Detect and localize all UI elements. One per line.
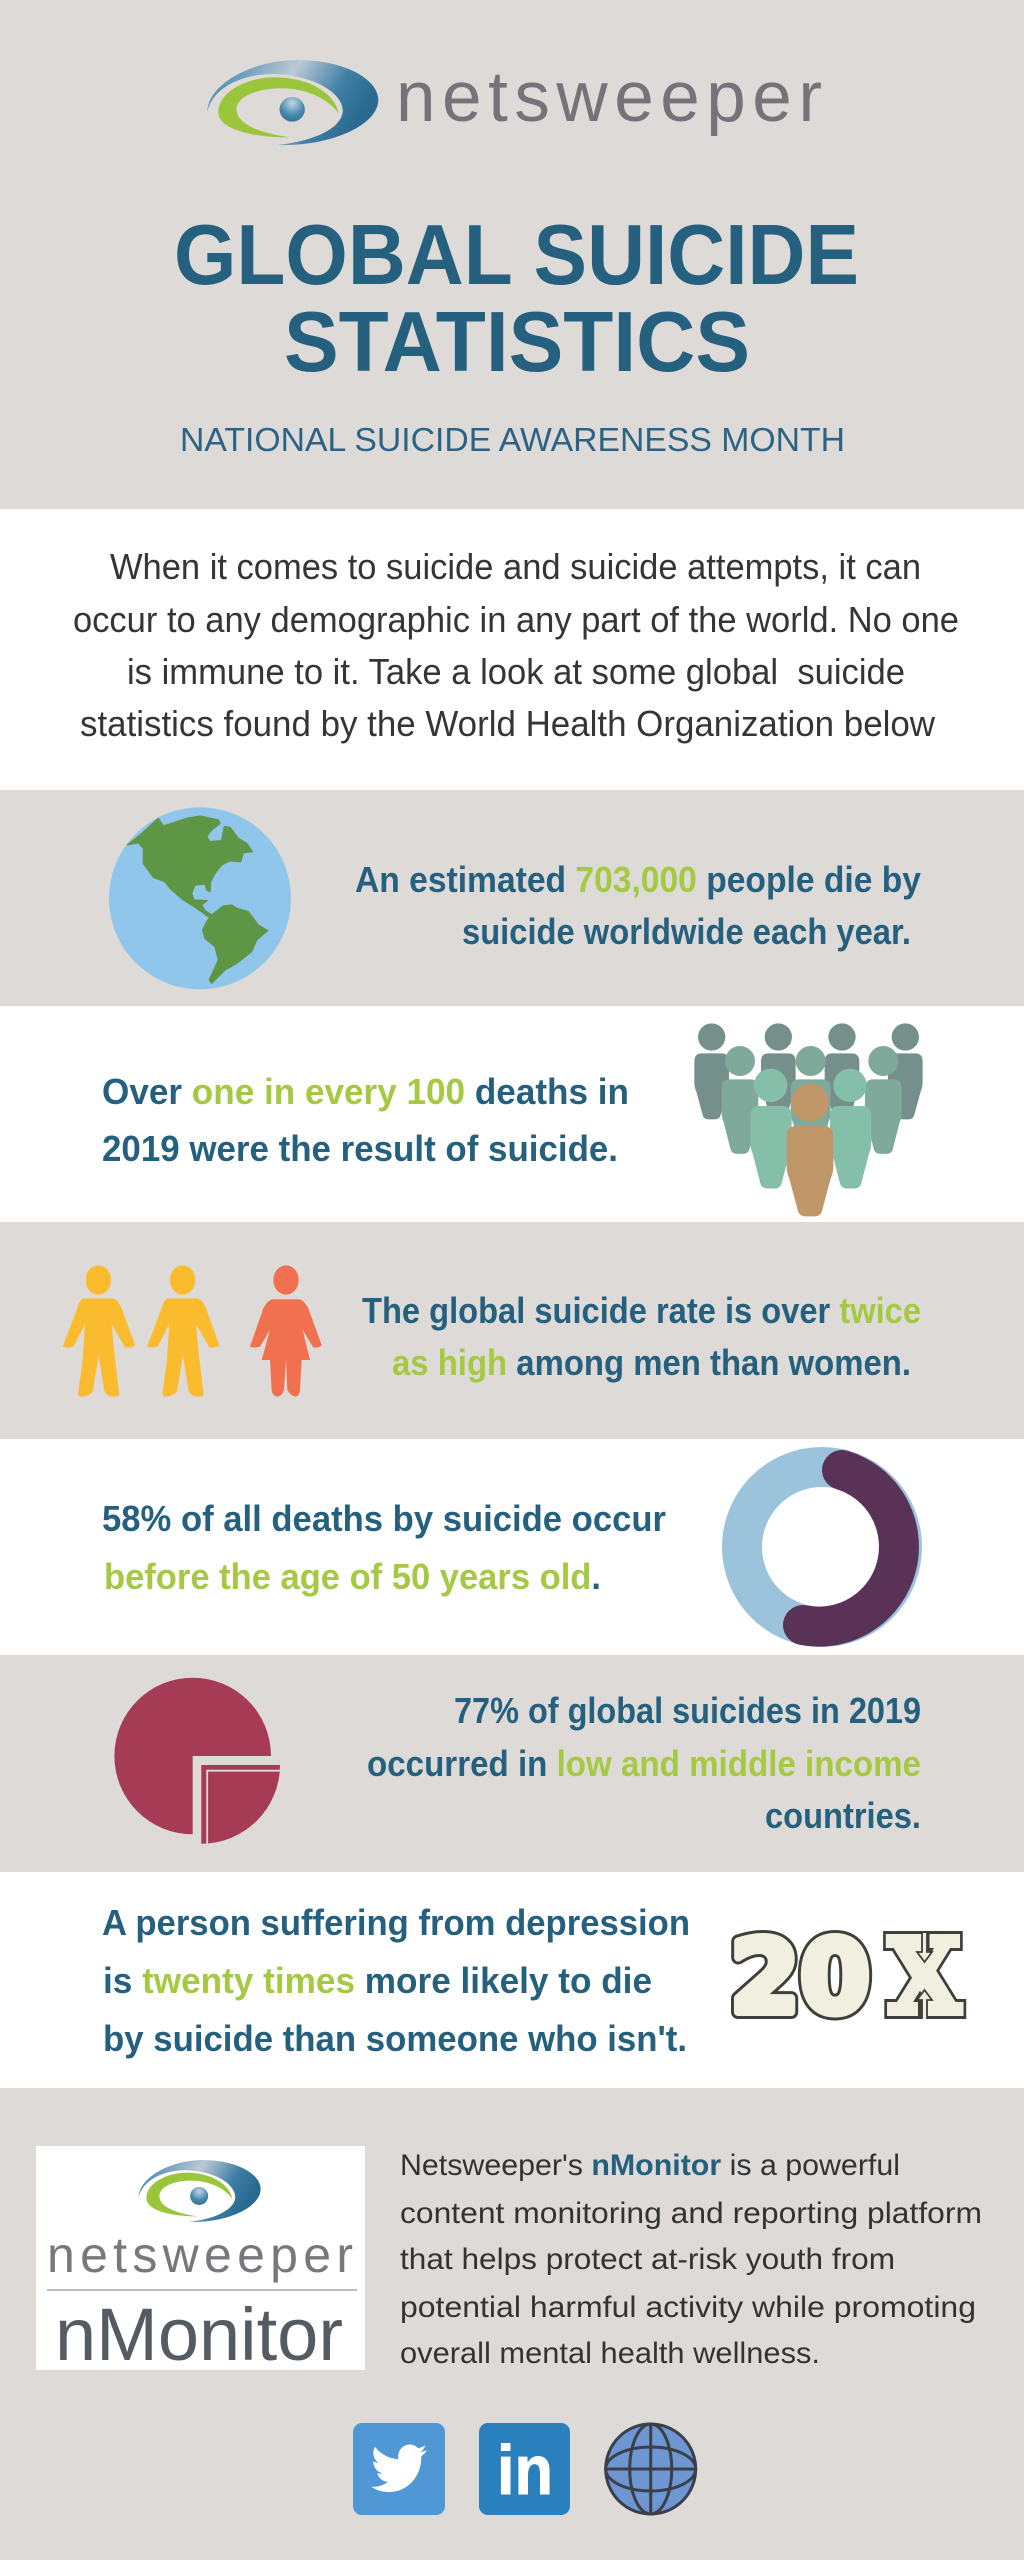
- stat text: [355, 859, 921, 952]
- icon: 20X lettering: 20: [730, 1918, 870, 2036]
- chart: donut 58 percent: [742, 1467, 902, 1627]
- icon: netsweeper eye logo: [207, 60, 378, 145]
- intro text: occur to any demographic in any part of the world. No one: [73, 599, 959, 640]
- panel: introduction: [0, 509, 1024, 790]
- stat text: 77% of global suicides in 2019: [454, 1690, 921, 1731]
- stat text: countries.: [765, 1795, 921, 1836]
- stat text: [362, 1290, 921, 1383]
- product description: potential harmful activity while promoting: [400, 2291, 976, 2324]
- stat text: [102, 1071, 629, 1169]
- icon: 20X lettering: X: [889, 1917, 961, 2036]
- product description: overall mental health wellness.: [400, 2337, 820, 2370]
- logo wordmark: netsweeper: [396, 58, 822, 137]
- icon: small eye logo: [139, 2160, 261, 2222]
- product description: Netsweeper's nMonitor is a powerful: [400, 2149, 900, 2182]
- stat text: by suicide than someone who isn't.: [103, 2018, 687, 2059]
- icon: twitter: [353, 2423, 445, 2515]
- stat text: is twenty times more likely to die: [103, 1960, 652, 2001]
- product description: content monitoring and reporting platform: [400, 2197, 982, 2230]
- title: GLOBAL SUICIDE: [174, 208, 859, 303]
- panel: 703,000 deaths: [0, 790, 1024, 1007]
- panel: 58 percent before 50: [0, 1439, 1024, 1655]
- stat text: 2019 were the result of suicide.: [102, 1128, 618, 1169]
- panel: header: [0, 0, 1024, 509]
- stat text: Over one in every 100 deaths in: [102, 1071, 629, 1112]
- icon: linkedin: in: [497, 2431, 553, 2509]
- stat text: [367, 1690, 921, 1836]
- panel: footer: [0, 2088, 1024, 2560]
- icon: linkedin: [479, 2423, 570, 2515]
- icon: 20X lettering: 20: [730, 1918, 870, 2036]
- product description: [400, 2149, 982, 2370]
- panel: twenty times: [0, 1872, 1024, 2088]
- icon: two men and one woman: [63, 1265, 322, 1397]
- product description: that helps protect at-risk youth from: [400, 2243, 895, 2276]
- netsweeper wordmark: netsweeper: [47, 2227, 353, 2283]
- nMonitor logo card: [36, 2146, 365, 2376]
- subtitle: NATIONAL SUICIDE AWARENESS MONTH: [180, 421, 845, 458]
- stat text: suicide worldwide each year.: [462, 911, 911, 952]
- panel: men versus women: [0, 1222, 1024, 1439]
- chart: pie 77 percent: [114, 1678, 282, 1846]
- stat text: An estimated 703,000 people die by: [355, 859, 921, 900]
- intro text: is immune to it. Take a look at some global suicide: [127, 651, 905, 692]
- stat text: [102, 1498, 666, 1597]
- intro text: statistics found by the World Health Organization below: [80, 703, 936, 744]
- stat text: before the age of 50 years old.: [104, 1556, 601, 1597]
- icon: 20X lettering: X: [889, 1917, 961, 2036]
- stat text: 58% of all deaths by suicide occur: [102, 1498, 666, 1539]
- title: [174, 208, 859, 390]
- title: STATISTICS: [284, 295, 750, 390]
- stat text: A person suffering from depression: [102, 1902, 690, 1943]
- stat text: The global suicide rate is over twice: [362, 1290, 921, 1331]
- icon: crowd of people: [694, 1023, 923, 1216]
- stat text: as high among men than women.: [392, 1342, 911, 1383]
- stat text: [102, 1902, 690, 2059]
- panel: one in every 100: [0, 1006, 1024, 1222]
- intro text: [73, 546, 959, 744]
- icon: website globe: [606, 2424, 696, 2514]
- panel: 77 percent low and middle income: [0, 1655, 1024, 1872]
- nMonitor wordmark: nMonitor: [55, 2293, 343, 2376]
- stat text: occurred in low and middle income: [367, 1743, 921, 1784]
- intro text: When it comes to suicide and suicide attempts, it can: [110, 546, 921, 587]
- icon: globe: [109, 807, 291, 989]
- icon: 20X lettering: [730, 1917, 961, 2036]
